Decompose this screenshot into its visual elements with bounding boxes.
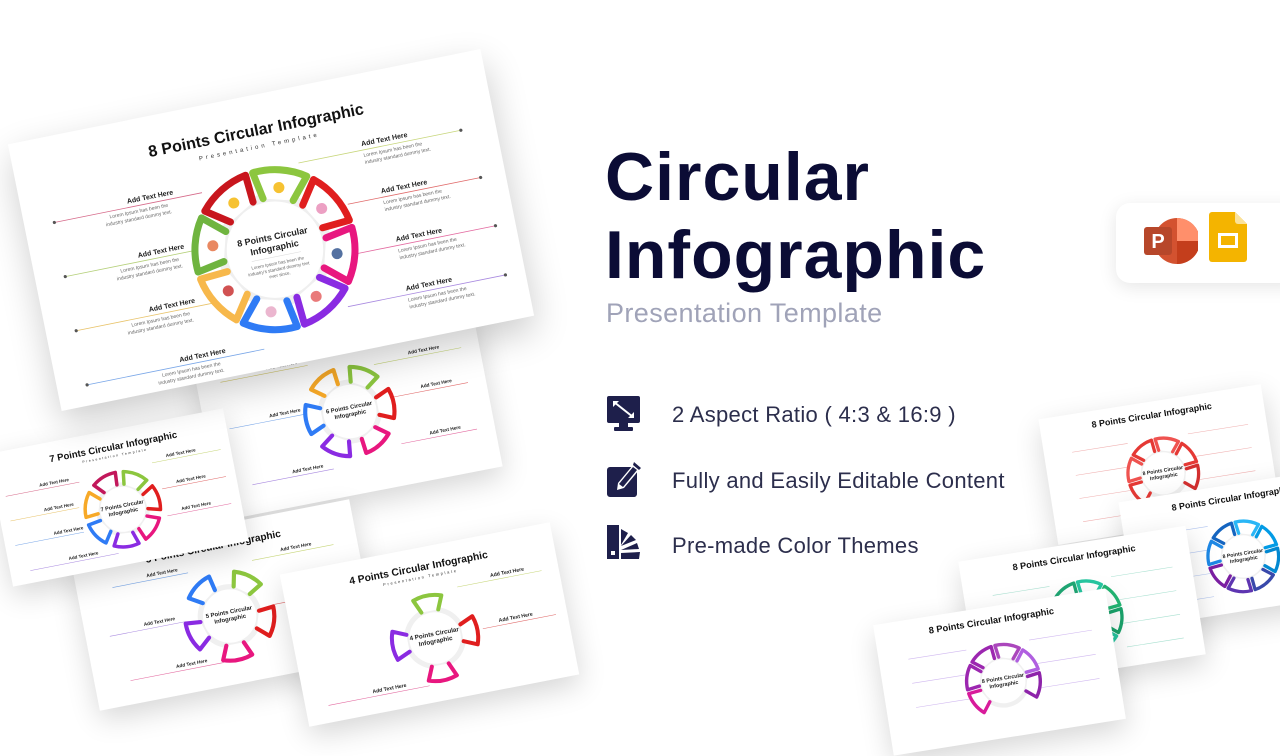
slide: main 8 points: industry standard dummy text. [409, 291, 476, 311]
slide: main 8 points: industry standard dummy text. [116, 263, 184, 282]
slide: 7 points: Infographic [108, 507, 139, 519]
slide: blue theme: 8 Points Circular [1222, 548, 1264, 560]
slide: main 8 points: Add Text Here [148, 298, 196, 314]
feature 2: editable: Fully and Easily Editable Content [672, 468, 1005, 493]
slide: 5 points: Add Text Here [146, 567, 179, 579]
slide: main 8 points: ever since. [269, 270, 291, 279]
slide: 5 points: 5 Points Circular Infographic [145, 529, 282, 566]
slide: 6 points (behind main): Add Text Here [266, 360, 298, 372]
slide: 4 points: Presentation Template [383, 568, 458, 587]
slide: main 8 points: Lorem Ipsum has been the [251, 255, 305, 271]
icon: pencil [607, 462, 641, 497]
slide: 6 points (behind main): 6 Points Circular [326, 401, 373, 416]
slide: main 8 points: industry standard dummy text. [399, 242, 466, 261]
slide: red theme: Infographic [1150, 472, 1178, 482]
slide: 4 points: Infographic [418, 635, 454, 648]
slide: 6 points (behind main): Add Text Here [269, 407, 301, 419]
slide: main 8 points [8, 49, 534, 411]
slide: 5 points: Infographic [214, 614, 247, 626]
slide: red theme [1038, 384, 1280, 545]
slide: 7 points: 7 Points Circular Infographic [49, 430, 178, 465]
petals [176, 150, 374, 349]
slide: 5 points [69, 499, 380, 711]
slide: 4 points: Add Text Here [490, 567, 525, 579]
title: Circular [605, 139, 870, 215]
feature 3: color themes: Pre-made Color Themes [672, 533, 919, 558]
slide: 6 points (behind main): Add Text Here [292, 463, 324, 475]
slide: green theme: 8 Points Circular [1064, 608, 1107, 621]
slide: main 8 points: Add Text Here [126, 189, 174, 206]
slide: 5 points: Add Text Here [280, 541, 312, 553]
feature 1: aspect ratio [607, 396, 956, 431]
slide: purple theme: Infographic [989, 680, 1019, 690]
slide: 6 points (behind main): Add Text Here [420, 378, 453, 390]
slide: main 8 points: Lorem Ipsum has been the [109, 203, 169, 220]
slide: main 8 points: Add Text Here [405, 277, 453, 293]
icon: google slides [1209, 212, 1247, 262]
slide: 4 points: 4 Points Circular Infographic [349, 550, 489, 587]
slide: red theme: 8 Points Circular Infographic [1091, 401, 1213, 430]
slide: main 8 points: industry standard dummy text. [127, 317, 194, 337]
slide: purple theme: 8 Points Circular Infographic [928, 606, 1055, 636]
slide: main 8 points: Lorem Ipsum has been the [162, 361, 221, 379]
slide: main 8 points: industry standard dummy text. [158, 368, 225, 387]
slide: 7 points: 7 Points Circular [100, 499, 145, 513]
title: Infographic [605, 217, 986, 293]
icon: powerpoint [1144, 218, 1198, 264]
slide: main 8 points: Add Text Here [179, 348, 226, 364]
slide: 4 points: Add Text Here [498, 612, 533, 624]
slide: 7 points: Add Text Here [39, 477, 70, 488]
slide: main 8 points: Add Text Here [361, 132, 408, 148]
slide title: 8 Points Circular Infographic [147, 100, 365, 161]
feature 3: color themes [607, 525, 919, 559]
slide: green theme: 8 Points Circular Infographic [1012, 543, 1136, 572]
slide: 5 points: Add Text Here [176, 658, 208, 670]
slide: 6 points (behind main): Add Text Here [407, 344, 440, 356]
slide: 5 points: 5 Points Circular [205, 605, 253, 620]
slide: main 8 points: Lorem Ipsum has been the [131, 311, 191, 329]
slide: 7 points: Add Text Here [181, 500, 212, 511]
slide: 7 points: Presentation Template [82, 448, 148, 464]
slide: 4 points: 4 Points Circular [409, 626, 460, 643]
slide: main 8 points: Infographic [250, 238, 300, 257]
title [605, 139, 986, 293]
slide: 5 points: Add Text Here [295, 587, 327, 599]
icon: monitor [607, 396, 640, 431]
slide: 7 points: Add Text Here [53, 525, 84, 536]
slide: purple theme: 8 Points Circular [982, 673, 1025, 685]
slide: main 8 points: Lorem Ipsum has been the [408, 286, 467, 304]
slide: main 8 points: 8 Points Circular [236, 225, 309, 249]
slide: main 8 points: industry standard dummy text. [384, 194, 451, 213]
slide: 7 points: Add Text Here [165, 447, 196, 458]
slide: green theme [958, 526, 1206, 690]
slide: blue theme: Infographic [1230, 555, 1258, 565]
slide: main 8 points: industry standard dummy text. [364, 147, 431, 166]
slide: 6 points (behind main): Infographic [334, 409, 368, 421]
slide: red theme: 8 Points Circular [1142, 465, 1184, 477]
slide: 4 points: Add Text Here [372, 683, 407, 695]
slide: green theme: Infographic [1072, 616, 1101, 626]
center ring [208, 182, 342, 317]
slide: 7 points: Add Text Here [68, 550, 99, 561]
slide: purple theme [873, 588, 1126, 756]
slide: main 8 points: Presentation Template [199, 132, 320, 162]
slide: 4 points [280, 522, 579, 727]
slide: main 8 points: industry standard dummy text. [106, 209, 173, 228]
slide: main 8 points: Lorem Ipsum has been the [383, 188, 443, 206]
slide: main 8 points: Lorem Ipsum has been the [363, 141, 423, 159]
slide: 7 points: Add Text Here [176, 473, 207, 484]
subtitle: Presentation Template [606, 298, 883, 328]
icon: powerpoint: P [1151, 231, 1165, 253]
feature 2: editable [607, 462, 1005, 497]
slide: main 8 points: industry's standard dummy text [248, 260, 311, 277]
icon: color fan [607, 525, 640, 559]
slide: 7 points [0, 408, 249, 587]
slide: 6 points (behind main) [192, 309, 503, 521]
slide: blue theme [1118, 467, 1280, 628]
slide: main 8 points: Add Text Here [137, 244, 185, 260]
slide: main 8 points: Add Text Here [380, 179, 428, 195]
slide: 5 points: Add Text Here [143, 616, 176, 628]
slide: main 8 points: Lorem Ipsum has been the [120, 257, 180, 275]
slide: main 8 points: Add Text Here [395, 227, 443, 244]
feature 1: aspect ratio: 2 Aspect Ratio ( 4:3 & 16:9 ) [672, 402, 956, 427]
slide: main 8 points: Lorem Ipsum has been the [398, 237, 458, 254]
slide: 6 points (behind main): Add Text Here [429, 425, 462, 437]
app icons box [1116, 203, 1280, 283]
petal icons [196, 171, 354, 328]
slide: 7 points: Add Text Here [44, 502, 75, 512]
